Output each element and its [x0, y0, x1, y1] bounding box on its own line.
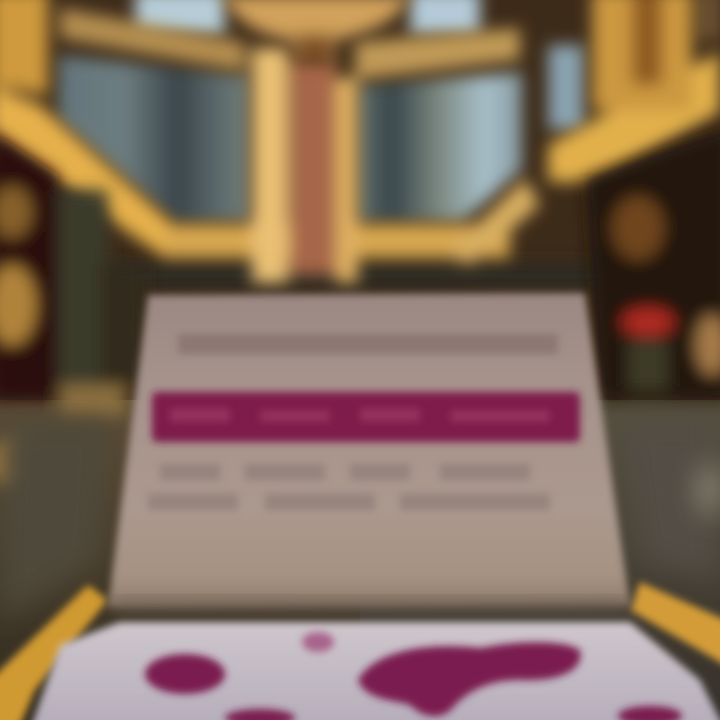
heading line — [178, 334, 558, 354]
paper bottom shadow — [112, 598, 628, 612]
gold floor trim left — [0, 585, 108, 720]
left dark cabinet — [0, 130, 145, 486]
windows and sky — [58, 0, 620, 290]
floor with spilled purple — [30, 622, 720, 720]
gold floor trim right — [630, 582, 720, 668]
body text lines — [148, 464, 550, 510]
floor surface — [30, 622, 720, 720]
golden architecture beams — [0, 0, 720, 283]
icon: golden chalice at top — [222, 0, 410, 64]
purple stains — [145, 632, 682, 720]
paper sheet — [108, 293, 630, 607]
purple banner — [152, 392, 580, 442]
right dark cabinet — [585, 128, 720, 400]
document panel — [108, 293, 630, 612]
lower side floors — [0, 420, 720, 620]
banner texture — [170, 408, 550, 422]
